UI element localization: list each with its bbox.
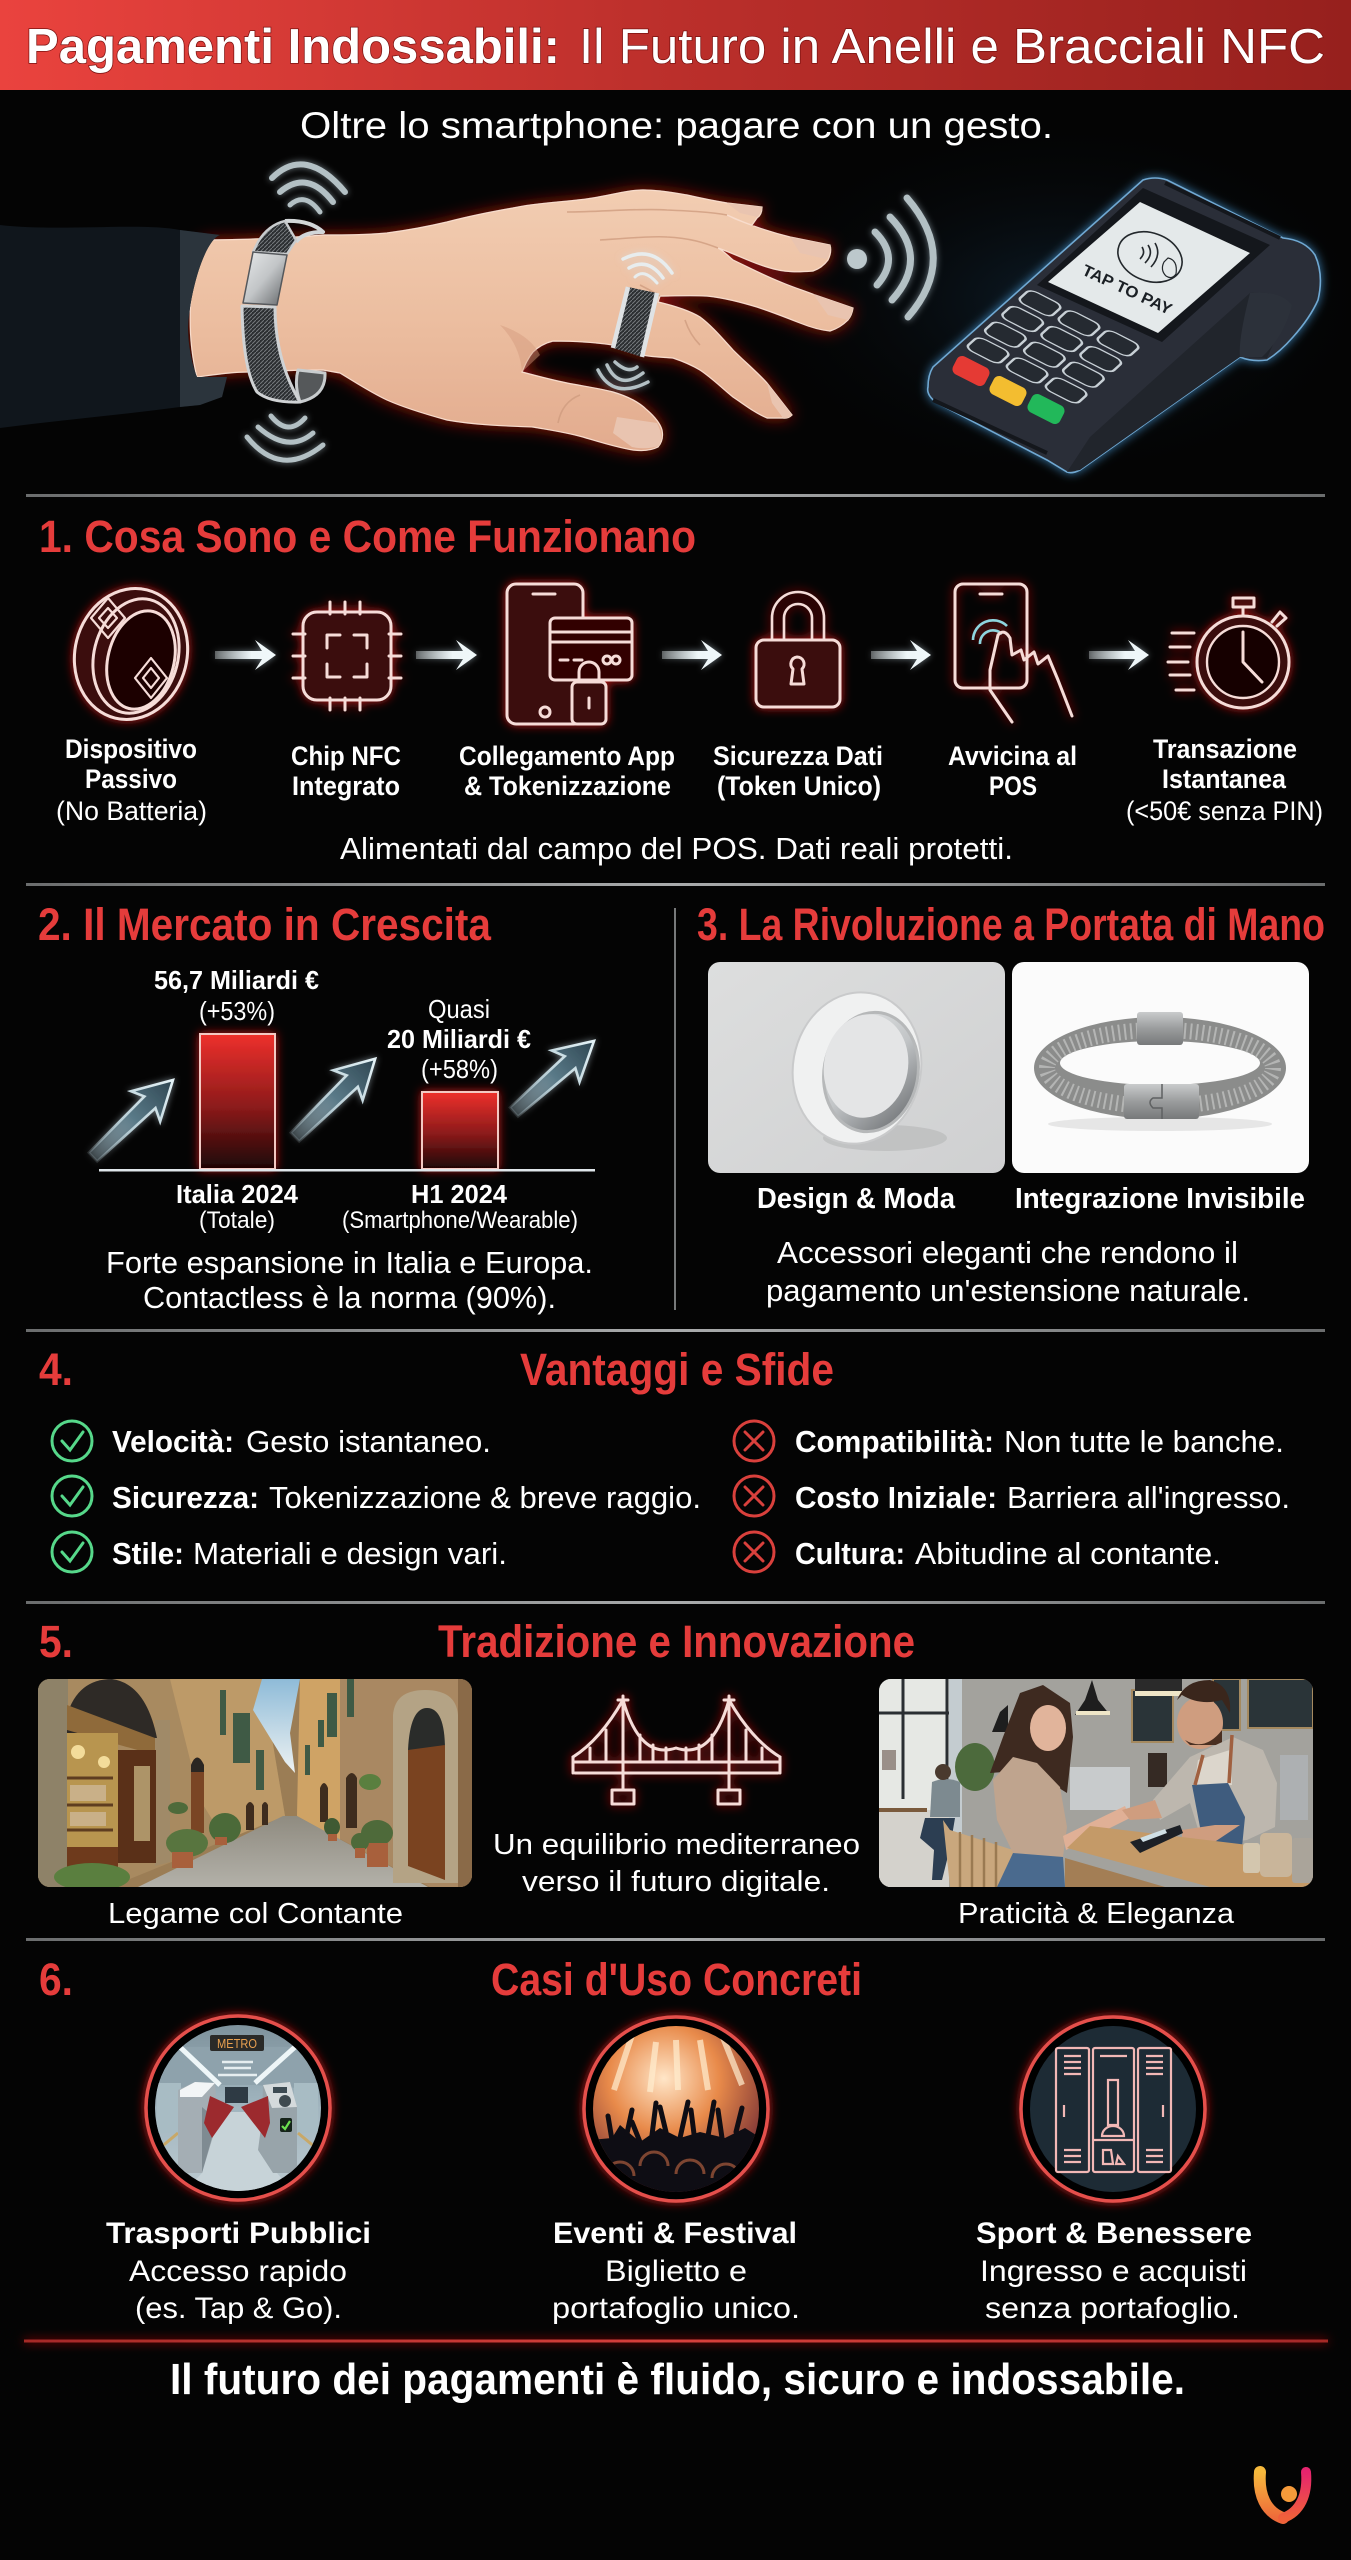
step 6 text: Transazione <box>1153 734 1297 764</box>
step labels <box>56 734 1323 826</box>
step 1 text: Passivo <box>85 764 177 794</box>
screen <box>1048 202 1250 333</box>
bar: H1 2024 <box>422 1092 498 1169</box>
use case: events: Eventi & Festival <box>553 2217 797 2250</box>
photo: italian street <box>38 1679 472 1891</box>
icon: phone with card and lock <box>507 584 632 724</box>
tap to pay label: TAP TO PAY <box>1079 262 1175 319</box>
bracelet <box>242 221 325 402</box>
category 1: Italia 2024 <box>176 1179 299 1209</box>
step 2 text: Integrato <box>292 771 400 801</box>
challenge: cost <box>734 1476 1290 1516</box>
panel: use cases <box>39 1954 1252 2325</box>
use case: transport: Trasporti Pubblici <box>106 2217 371 2250</box>
step 1 text: Dispositivo <box>65 734 197 764</box>
step 3 text: & Tokenizzazione <box>464 771 671 801</box>
ring on finger <box>613 287 657 357</box>
nails <box>613 203 853 448</box>
title regular part: Il Futuro in Anelli e Bracciali NFC <box>579 20 1325 74</box>
photo: cafe payment <box>879 1679 1313 1887</box>
axis <box>99 1169 595 1172</box>
number 4: 4. <box>39 1344 73 1395</box>
icon: phone with hand <box>955 584 1072 722</box>
step 2 text <box>291 741 401 801</box>
use case: sport <box>976 2217 1252 2325</box>
bar chart <box>78 965 608 1234</box>
advantage: style: Materiali e design vari. <box>193 1536 507 1571</box>
number 6: 6. <box>39 1954 73 2005</box>
market note: Forte espansione in Italia e Europa. <box>106 1245 593 1280</box>
use case: events <box>552 2217 800 2325</box>
heading: section 5: Tradizione e Innovazione <box>438 1616 915 1667</box>
advantage: security <box>52 1476 701 1516</box>
use case: transport <box>106 2217 371 2325</box>
growth arrow 2 <box>280 1044 390 1152</box>
keypad <box>965 289 1141 405</box>
icon: lockers <box>1021 2017 1205 2201</box>
step 3 text: Collegamento App <box>459 741 675 771</box>
bridge text: verso il futuro digitale. <box>522 1866 830 1898</box>
advantage: speed <box>52 1421 491 1461</box>
icon: bridge <box>573 1696 780 1804</box>
contactless symbol <box>1111 223 1189 291</box>
bridge text: Un equilibrio mediterraneo <box>493 1829 860 1861</box>
growth arrow 1 <box>78 1065 188 1172</box>
heading: section 1: 1. Cosa Sono e Come Funzionano <box>39 511 696 562</box>
challenge: culture: Abitudine al contante. <box>915 1536 1221 1571</box>
challenge: compatibility: Compatibilità: <box>795 1424 994 1459</box>
step 6 text: (<50€ senza PIN) <box>1126 796 1323 826</box>
arrow <box>1089 640 1149 670</box>
heading: section 2: 2. Il Mercato in Crescita <box>38 899 492 950</box>
category 2: H1 2024 <box>411 1179 508 1209</box>
step 3 text <box>459 741 675 801</box>
challenge: culture: Cultura: <box>795 1536 905 1571</box>
value 1 <box>154 965 319 1026</box>
finger creases and palm shadow <box>558 209 727 423</box>
step 1 text: (No Batteria) <box>56 796 207 826</box>
caption: cash: Legame col Contante <box>108 1898 403 1930</box>
challenge: cost: Costo Iniziale: <box>795 1480 997 1515</box>
hand <box>190 190 853 451</box>
value 2: Quasi <box>428 994 490 1024</box>
step 4 text <box>713 741 883 801</box>
panel: advantages and challenges <box>39 1344 1290 1572</box>
photo: bracelet <box>1012 962 1309 1173</box>
advantage: style: Stile: <box>112 1536 184 1571</box>
icon: metro gate <box>146 2016 330 2200</box>
step 6 text <box>1126 734 1323 826</box>
challenge: cost: Barriera all'ingresso. <box>1007 1480 1290 1515</box>
category 1 <box>176 1179 299 1234</box>
use case: transport: (es. Tap & Go). <box>135 2292 342 2325</box>
challenge: compatibility <box>734 1421 1284 1461</box>
caption: design: Design & Moda <box>757 1183 956 1215</box>
icon: padlock <box>756 592 840 707</box>
advantage: speed: Velocità: <box>112 1424 234 1459</box>
caption: integration: Integrazione Invisibile <box>1015 1183 1305 1215</box>
POS terminal <box>928 178 1320 473</box>
process flow <box>61 576 1289 732</box>
panel: revolution <box>697 899 1325 1308</box>
use case: sport: senza portafoglio. <box>985 2292 1240 2325</box>
value 1: (+53%) <box>199 996 275 1026</box>
step 4 text: Sicurezza Dati <box>713 741 883 771</box>
revolution note <box>766 1235 1250 1308</box>
use case: sport: Sport & Benessere <box>976 2217 1252 2250</box>
arrow <box>662 640 722 670</box>
market note <box>106 1245 593 1315</box>
icon: concert crowd <box>584 2017 768 2201</box>
use case: events: Biglietto e <box>605 2255 747 2288</box>
advantage: security: Sicurezza: <box>112 1480 259 1515</box>
value 1: 56,7 Miliardi € <box>154 965 319 995</box>
sleeve <box>0 225 227 428</box>
closing statement: Il futuro dei pagamenti è fluido, sicuro e indossabile. <box>170 2355 1185 2404</box>
step 5 text: POS <box>989 771 1037 801</box>
step 6 text: Istantanea <box>1162 764 1287 794</box>
use case: sport: Ingresso e acquisti <box>980 2255 1247 2288</box>
value 2 <box>387 994 531 1084</box>
bar: Italia 2024 <box>200 1034 275 1169</box>
panel: market growth <box>38 899 608 1315</box>
challenge: compatibility: Non tutte le banche. <box>1004 1424 1284 1459</box>
logo <box>1260 2472 1306 2518</box>
step 1 text <box>56 734 207 826</box>
market note: Contactless è la norma (90%). <box>143 1280 556 1315</box>
metro sign: METRO <box>217 2036 257 2051</box>
revolution note: pagamento un'estensione naturale. <box>766 1273 1250 1308</box>
revolution note: Accessori eleganti che rendono il <box>777 1235 1238 1270</box>
number 5: 5. <box>39 1616 73 1667</box>
value 2: 20 Miliardi € <box>387 1024 531 1054</box>
advantage: security: Tokenizzazione & breve raggio. <box>269 1480 701 1515</box>
bridge text <box>493 1829 860 1898</box>
heading: section 4: Vantaggi e Sfide <box>520 1344 834 1395</box>
icon: NFC chip <box>293 602 401 710</box>
photo: ring <box>708 962 1005 1173</box>
heading: section 6: Casi d'Uso Concreti <box>491 1954 862 2005</box>
advantage: style <box>52 1532 507 1572</box>
arrow <box>871 640 931 670</box>
category 1: (Totale) <box>199 1207 275 1234</box>
challenge: culture <box>734 1532 1221 1572</box>
step 4 text: (Token Unico) <box>717 771 881 801</box>
step 5 text: Avvicina al <box>948 741 1077 771</box>
title bold part: Pagamenti Indossabili: <box>26 20 560 74</box>
category 2 <box>342 1179 578 1234</box>
growth arrow 3 <box>500 1025 608 1128</box>
arrow <box>215 640 276 670</box>
icon: ring <box>61 576 201 732</box>
use case: transport: Accesso rapido <box>129 2255 347 2288</box>
use case: events: portafoglio unico. <box>552 2292 800 2325</box>
NFC waves around bracelet and ring <box>247 164 933 460</box>
coloured buttons <box>950 354 1067 426</box>
step 5 text <box>948 741 1077 801</box>
arrow <box>416 640 477 670</box>
panel: tradition and innovation <box>38 1616 1313 1930</box>
header banner <box>0 0 1351 90</box>
hero illustration: hand with bracelet and ring <box>0 190 853 451</box>
icon: stopwatch <box>1168 598 1289 708</box>
subtitle: Oltre lo smartphone: pagare con un gesto. <box>300 105 1053 146</box>
step 2 text: Chip NFC <box>291 741 401 771</box>
advantage: speed: Gesto istantaneo. <box>246 1424 491 1459</box>
value 2: (+58%) <box>421 1054 498 1084</box>
caption: practicality: Praticità & Eleganza <box>958 1898 1235 1930</box>
section 1 note: Alimentati dal campo del POS. Dati reali protetti. <box>340 831 1013 866</box>
category 2: (Smartphone/Wearable) <box>342 1207 578 1234</box>
